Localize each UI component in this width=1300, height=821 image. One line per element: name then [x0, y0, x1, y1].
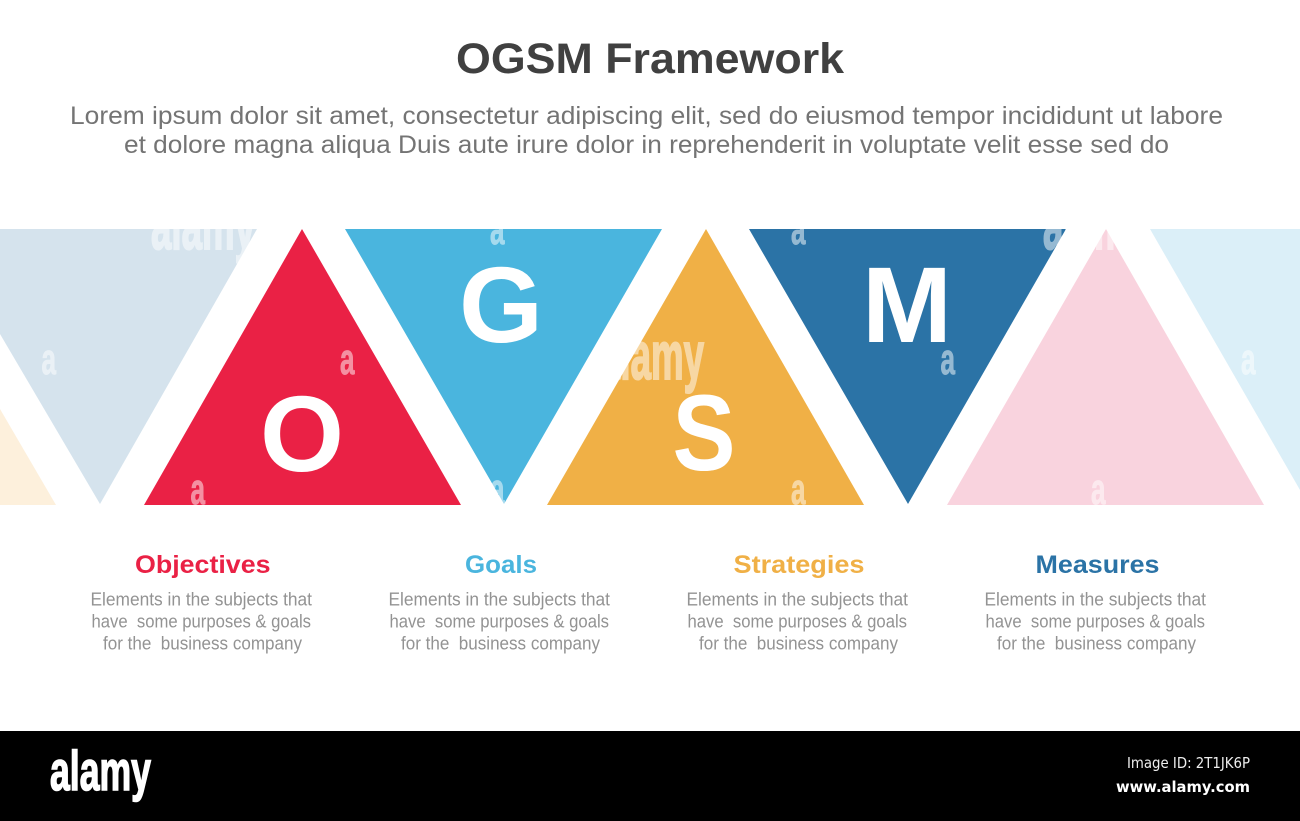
- heading: measures: Measures: [1036, 551, 1160, 579]
- text: goals: Elements in the subjects that: [388, 590, 610, 610]
- triangle G: [345, 229, 662, 504]
- text: measures: for the business company: [997, 634, 1196, 654]
- stock photo watermarks: alamy: [151, 188, 255, 264]
- column: objectives: [90, 551, 312, 654]
- triangle M: M: [862, 244, 952, 365]
- text: objectives: have some purposes & goals: [92, 612, 311, 632]
- text: measures: [984, 590, 1206, 654]
- stock photo watermarks: a: [490, 205, 505, 254]
- heading: objectives: Objectives: [135, 551, 270, 579]
- footer logo: alamy: [50, 739, 151, 802]
- triangle M: [749, 229, 1066, 504]
- footer url: www.alamy.com: [1116, 778, 1250, 796]
- faded inverted triangle left: [0, 229, 257, 504]
- stock photo watermarks: a: [190, 465, 205, 514]
- stock photo watermarks: a: [1241, 335, 1256, 384]
- text: objectives: [90, 590, 312, 654]
- subtitle text: Lorem ipsum dolor sit amet, consectetur adipiscing elit, sed do eiusmod tempor incididunt ut labore: [70, 102, 1223, 130]
- column: strategies: [686, 551, 908, 654]
- subtitle text: [70, 102, 1223, 159]
- subtitle text: et dolore magna aliqua Duis aute irure dolor in reprehenderit in voluptate velit esse sed do: [124, 131, 1169, 159]
- text: goals: have some purposes & goals: [390, 612, 609, 632]
- triangle G: G: [459, 244, 543, 365]
- text: goals: [388, 590, 610, 654]
- heading: strategies: Strategies: [734, 551, 864, 579]
- text: goals: for the business company: [401, 634, 600, 654]
- footer image id: Image ID: 2T1JK6P: [1127, 754, 1250, 772]
- column: goals: [388, 551, 610, 654]
- faded triangle pink: [947, 229, 1264, 505]
- text: measures: have some purposes & goals: [986, 612, 1205, 632]
- stock photo watermarks: alamy: [1043, 188, 1147, 264]
- column: measures: [984, 551, 1206, 654]
- text: strategies: for the business company: [699, 634, 898, 654]
- stock photo watermarks: alamy: [600, 318, 704, 394]
- stock photo watermarks: a: [791, 205, 806, 254]
- title: OGSM Framework: [456, 35, 844, 83]
- triangle S: [547, 229, 864, 505]
- stock photo watermarks: a: [940, 335, 955, 384]
- text: measures: Elements in the subjects that: [984, 590, 1206, 610]
- triangle O: O: [260, 373, 344, 494]
- heading: goals: Goals: [465, 551, 537, 579]
- stock photo watermarks: a: [1091, 465, 1106, 514]
- text: strategies: [686, 590, 908, 654]
- faded inverted triangle right: [1150, 229, 1300, 490]
- stock photo watermarks: a: [490, 465, 505, 514]
- stock photo watermarks: [42, 188, 1256, 514]
- text: objectives: for the business company: [103, 634, 302, 654]
- stock photo watermarks: a: [340, 335, 355, 384]
- footer bar: [0, 731, 1300, 821]
- text: strategies: Elements in the subjects that: [686, 590, 908, 610]
- text: strategies: have some purposes & goals: [688, 612, 907, 632]
- triangle S: S: [672, 372, 736, 493]
- stock photo watermarks: a: [42, 335, 56, 384]
- stock photo watermarks: a: [791, 465, 806, 514]
- text: objectives: Elements in the subjects that: [90, 590, 312, 610]
- triangle O: [144, 229, 461, 505]
- faded triangle far left: [0, 409, 56, 505]
